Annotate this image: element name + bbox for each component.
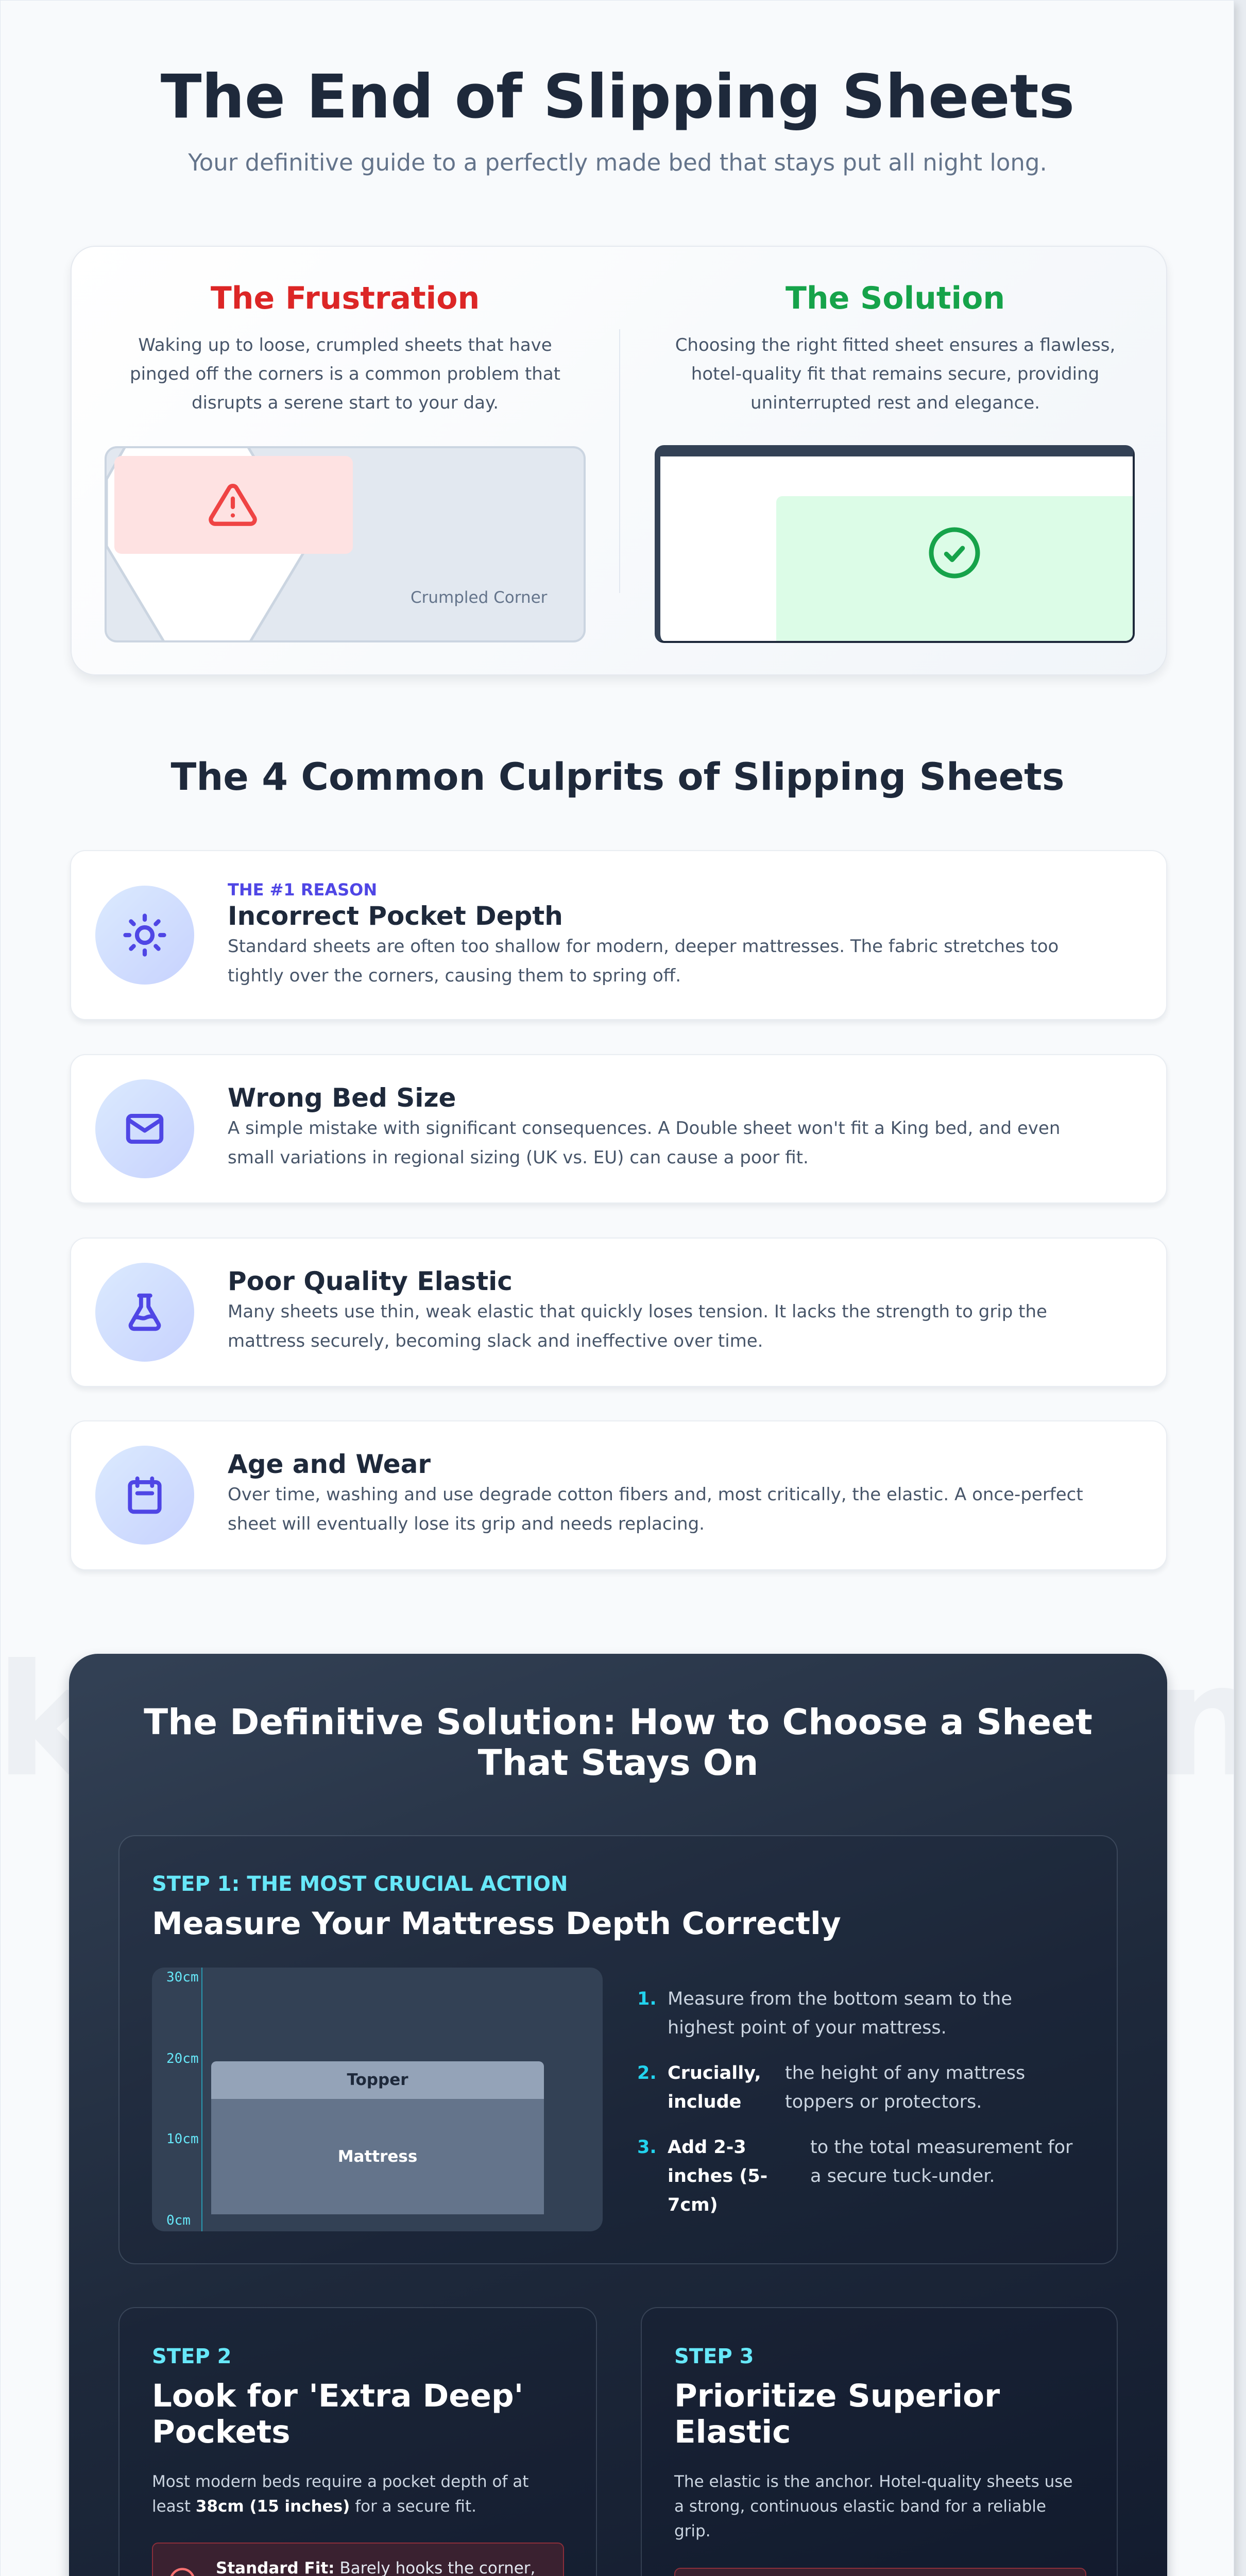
- divider: [619, 329, 620, 593]
- text: bed size: [228, 1083, 1060, 1168]
- bar: topper: [211, 2061, 544, 2099]
- heading: definitive solution: [144, 1702, 1093, 1784]
- text: elastic anchor: grip.: [674, 2522, 711, 2540]
- text: frustration description: disrupts a serene start to your day.: [192, 393, 499, 413]
- card: age and wear: [70, 1420, 1167, 1570]
- list: measuring steps: include: [668, 2092, 741, 2112]
- text: frustration description: [130, 335, 560, 413]
- text: solution description: hotel-quality fit that remains secure, providing: [691, 364, 1099, 384]
- bar: mattress: [211, 2099, 544, 2214]
- heading: definitive solution: The Definitive Solution: How to Choose a Sheet: [144, 1702, 1093, 1743]
- text: frustration description: pinged off the corners is a common problem that: [130, 364, 560, 384]
- text: pocket depth requirement: [152, 2472, 528, 2516]
- text: elastic: [228, 1266, 1047, 1351]
- watermark: faint background letters: [1, 1644, 1234, 1799]
- illustration: crumpled corner: [105, 446, 586, 642]
- callout: weak elastic: [674, 2568, 1086, 2576]
- heading: definitive solution: That Stays On: [478, 1742, 758, 1784]
- panel: definitive solution: [69, 1654, 1167, 2576]
- bar: mattress: Mattress: [338, 2147, 417, 2166]
- icon: envelope: [95, 1079, 194, 1178]
- list: measuring steps: Measure from the bottom seam to the: [668, 1989, 1012, 2009]
- label: step 2: STEP 2: [152, 2345, 232, 2368]
- text: pocket depth: [228, 880, 1059, 986]
- list: measuring steps: 3.: [637, 2137, 657, 2158]
- list: measuring steps: [637, 1989, 1072, 2215]
- text: age: Age and Wear: [228, 1449, 431, 1479]
- icon: sun: [95, 886, 194, 985]
- card: poor quality elastic: [70, 1238, 1167, 1387]
- heading: the frustration: The Frustration: [211, 280, 480, 316]
- label: crumpled corner: Crumpled Corner: [411, 588, 547, 607]
- panel: step 2: [118, 2307, 597, 2576]
- text: age: sheet will eventually lose its grip and needs replacing.: [228, 1514, 705, 1534]
- text: pocket depth: THE #1 REASON: [228, 880, 377, 900]
- chart: depth diagram: 20cm: [166, 2051, 199, 2066]
- icon: calendar: [95, 1446, 194, 1545]
- chart: depth diagram: 0cm: [166, 2213, 191, 2228]
- heading: superior elastic: [674, 2378, 1000, 2450]
- list: measuring steps: 7cm): [668, 2195, 718, 2215]
- callout: standard fit: [152, 2543, 564, 2576]
- heading: the solution: The Solution: [786, 280, 1005, 316]
- chart: depth diagram: [152, 1968, 603, 2231]
- text: pocket depth: Incorrect Pocket Depth: [228, 901, 563, 931]
- heading: superior elastic: Elastic: [674, 2414, 791, 2450]
- text: solution description: Choosing the right fitted sheet ensures a flawless,: [675, 335, 1115, 355]
- label: step 3: STEP 3: [674, 2345, 754, 2368]
- list: measuring steps: 1.: [637, 1989, 657, 2009]
- text: bed size: small variations in regional sizing (UK vs. EU) can cause a poor fit.: [228, 1147, 809, 1168]
- text: pocket depth: Standard sheets are often too shallow for modern, deeper mattresses. The fabric stretches too: [228, 936, 1059, 957]
- illustration: fitted sheet: [655, 445, 1135, 643]
- list: measuring steps: Add 2-3: [668, 2137, 746, 2158]
- text: pocket depth: tightly over the corners, causing them to spring off.: [228, 965, 681, 986]
- text: age: Over time, washing and use degrade cotton fibers and, most critically, the elastic. A once-perfect: [228, 1484, 1083, 1505]
- list: measuring steps: the height of any mattress: [785, 2063, 1025, 2083]
- text: solution description: uninterrupted rest and elegance.: [750, 393, 1040, 413]
- chart: depth diagram: 10cm: [166, 2131, 199, 2147]
- panel: frustration vs solution: [71, 246, 1167, 675]
- panel: step 3: [641, 2307, 1118, 2576]
- icon: flask: [95, 1263, 194, 1362]
- heading: measure: Measure Your Mattress Depth Correctly: [152, 1906, 841, 1942]
- list: measuring steps: 2.: [637, 2063, 657, 2083]
- section heading: culprits: The 4 Common Culprits of Slipping Sheets: [171, 755, 1064, 799]
- text: elastic anchor: a strong, continuous elastic band for a reliable: [674, 2497, 1046, 2516]
- text: elastic: Poor Quality Elastic: [228, 1266, 513, 1296]
- text: bed size: A simple mistake with significant consequences. A Double sheet won't fit a King bed, and even: [228, 1118, 1060, 1139]
- text: pocket depth requirement: Most modern beds require a pocket depth of at: [152, 2472, 528, 2491]
- chart: depth diagram: 30cm: [166, 1970, 199, 1985]
- list: measuring steps: Crucially,: [668, 2063, 761, 2083]
- list: measuring steps: inches (5-: [668, 2166, 767, 2187]
- list: measuring steps: a secure tuck-under.: [810, 2166, 995, 2187]
- icon: check circle: [929, 528, 980, 578]
- heading: extra deep pockets: [152, 2378, 523, 2450]
- text: elastic: mattress securely, becoming slack and ineffective over time.: [228, 1331, 763, 1351]
- title: The End of Slipping Sheets: [161, 61, 1074, 132]
- card: incorrect pocket depth: [70, 850, 1167, 1020]
- icon: warning: [209, 484, 257, 526]
- text: age: [228, 1449, 1083, 1534]
- card: wrong bed size: [70, 1054, 1167, 1204]
- bar: topper: Topper: [347, 2071, 408, 2089]
- panel: step 1: [118, 1835, 1118, 2264]
- list: measuring steps: toppers or protectors.: [785, 2092, 982, 2112]
- text: bed size: Wrong Bed Size: [228, 1083, 456, 1113]
- list: measuring steps: highest point of your mattress.: [668, 2018, 947, 2038]
- subtitle: Your definitive guide to a perfectly made bed that stays put all night long.: [188, 149, 1047, 176]
- heading: superior elastic: Prioritize Superior: [674, 2378, 1000, 2414]
- text: solution description: [675, 335, 1115, 413]
- heading: extra deep pockets: Look for 'Extra Deep': [152, 2378, 523, 2414]
- text: frustration description: Waking up to loose, crumpled sheets that have: [138, 335, 552, 355]
- label: step 1: STEP 1: THE MOST CRUCIAL ACTION: [152, 1872, 568, 1896]
- text: elastic anchor: [674, 2472, 1072, 2540]
- text: elastic anchor: The elastic is the anchor. Hotel-quality sheets use: [674, 2472, 1072, 2491]
- text: pocket depth requirement: least 38cm (15 inches) for a secure fit.: [152, 2497, 476, 2516]
- heading: extra deep pockets: Pockets: [152, 2414, 291, 2450]
- list: measuring steps: to the total measurement for: [810, 2137, 1072, 2158]
- text: elastic: Many sheets use thin, weak elastic that quickly loses tension. It lacks the strength to grip the: [228, 1301, 1047, 1322]
